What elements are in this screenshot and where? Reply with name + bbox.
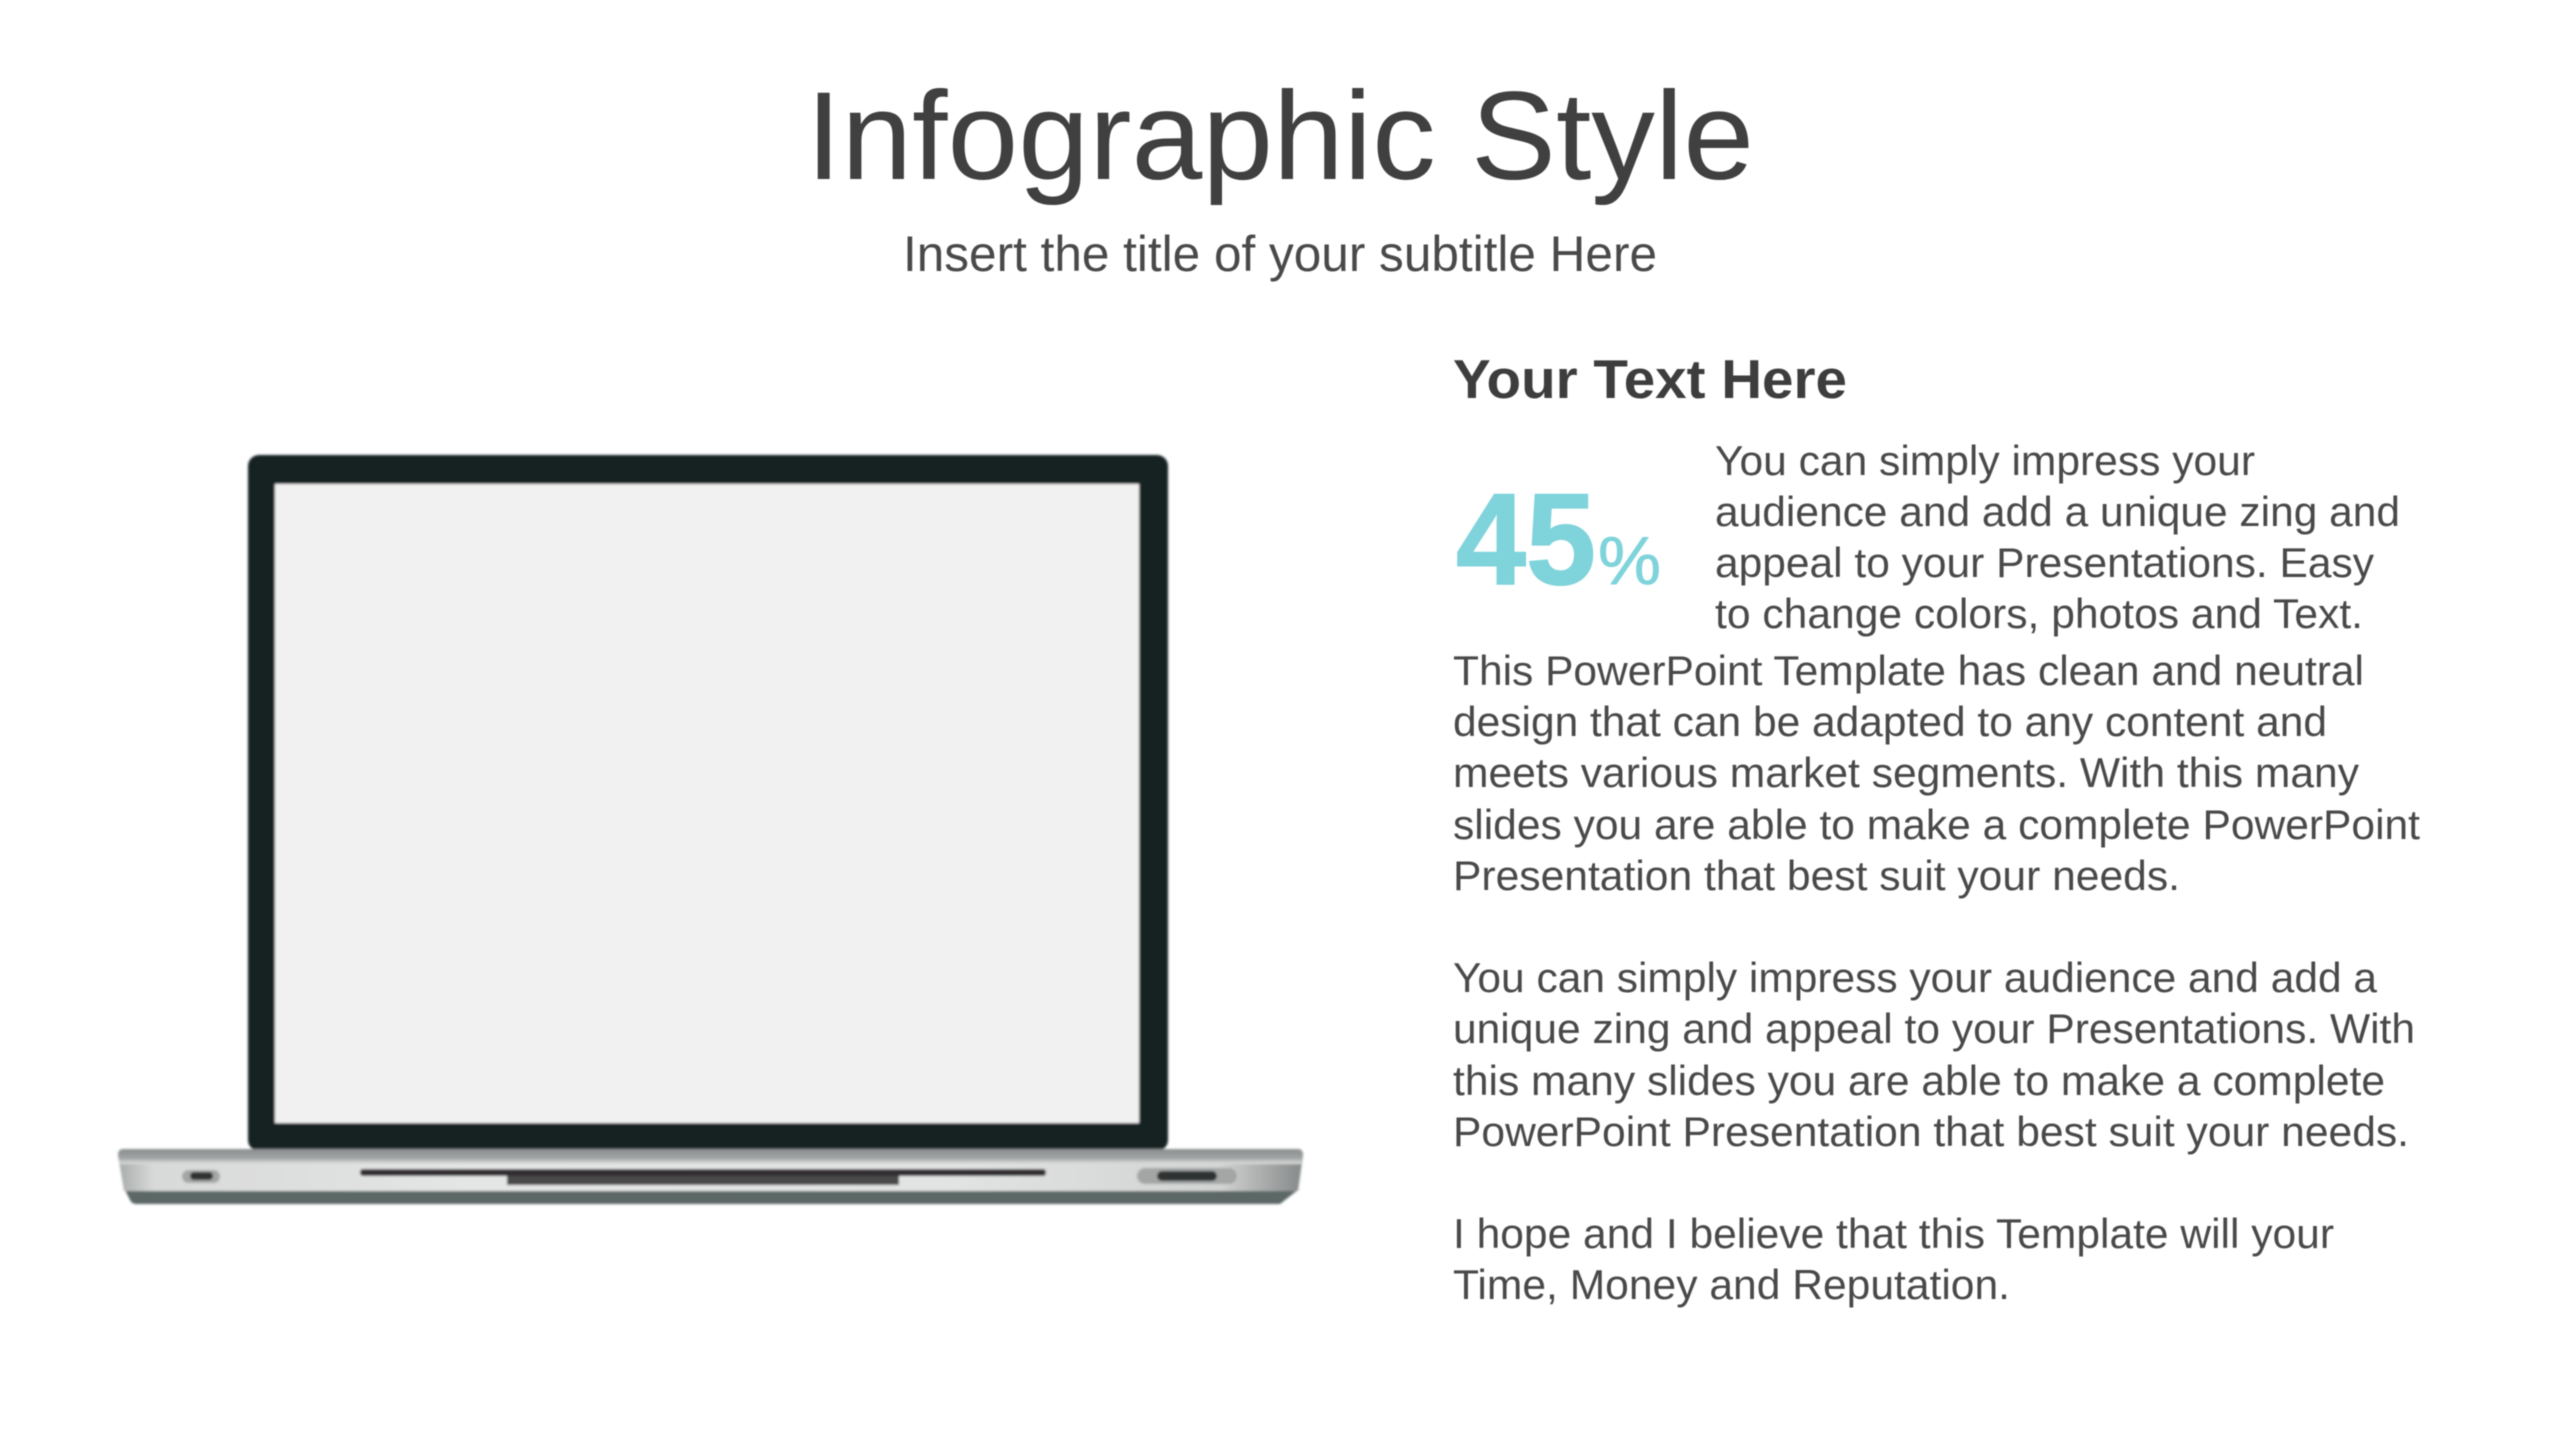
heading: Your Text Here xyxy=(1453,348,1847,410)
right port xyxy=(1137,1168,1237,1184)
intro paragraph: You can simply impress your xyxy=(1715,437,2255,484)
intro paragraph: appeal to your Presentations. Easy xyxy=(1715,539,2374,586)
subtitle: Insert the title of your subtitle Here xyxy=(903,226,1657,282)
intro paragraph: audience and add a unique zing and xyxy=(1715,488,2400,535)
body paragraph 1 xyxy=(1453,647,2420,899)
hinge slot xyxy=(360,1169,1046,1176)
hinge bar xyxy=(507,1176,899,1185)
laptop screen xyxy=(275,484,1139,1123)
body paragraph 1: meets various market segments. With this many xyxy=(1453,749,2359,796)
laptop base xyxy=(118,1149,1303,1204)
body paragraph 3: Time, Money and Reputation. xyxy=(1453,1261,2010,1308)
title: Infographic Style xyxy=(806,67,1754,206)
intro paragraph: to change colors, photos and Text. xyxy=(1715,590,2363,637)
laptop lid xyxy=(248,455,1168,1151)
body paragraph 2: PowerPoint Presentation that best suit your needs. xyxy=(1453,1108,2409,1155)
body paragraph 2: unique zing and appeal to your Presentations. With xyxy=(1453,1005,2415,1052)
body paragraph 1: This PowerPoint Template has clean and neutral xyxy=(1453,647,2364,694)
laptop illustration xyxy=(118,455,1303,1204)
body paragraph 2 xyxy=(1453,954,2415,1155)
body paragraph 2: You can simply impress your audience and add a xyxy=(1453,954,2378,1001)
body paragraph 1: design that can be adapted to any content and xyxy=(1453,698,2327,745)
left port xyxy=(182,1170,220,1183)
stat: 45%: 45 xyxy=(1456,466,1596,612)
body paragraph 3 xyxy=(1453,1210,2334,1308)
body paragraph 2: this many slides you are able to make a complete xyxy=(1453,1057,2385,1104)
body paragraph 1: Presentation that best suit your needs. xyxy=(1453,852,2180,899)
body paragraph 3: I hope and I believe that this Template will your xyxy=(1453,1210,2334,1257)
stat: 45%: % xyxy=(1598,523,1661,599)
intro paragraph xyxy=(1715,437,2400,637)
body paragraph 1: slides you are able to make a complete PowerPoint xyxy=(1453,801,2420,848)
